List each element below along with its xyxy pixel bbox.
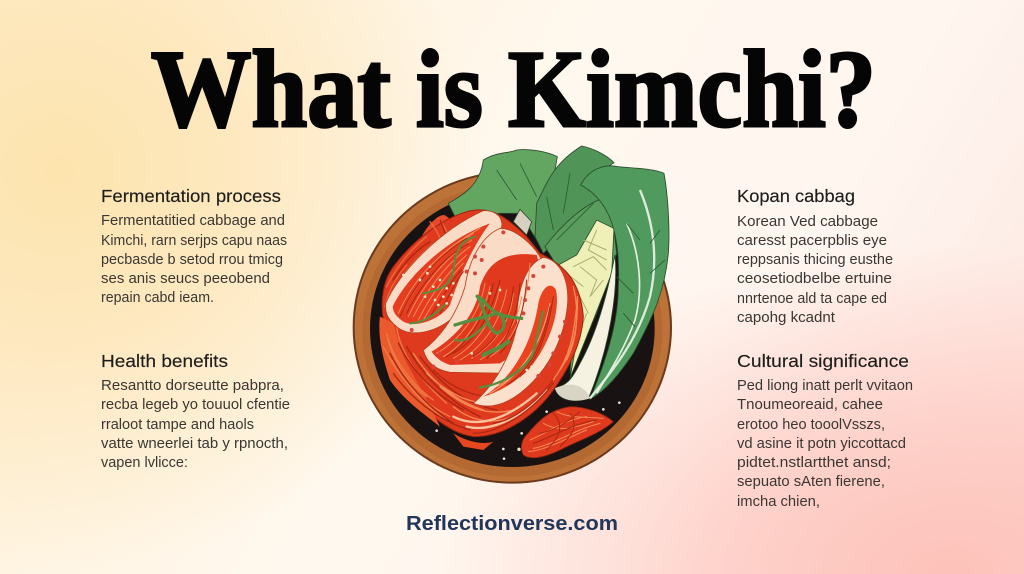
text block: cultural significance: Tnoumeoreaid, cahee	[737, 397, 883, 413]
text block: cultural significance	[737, 351, 913, 510]
text block: korean cabbage: Kopan cabbag	[737, 186, 855, 206]
text block: health benefits: recba legeb yo touuol cfentie	[101, 397, 290, 413]
cabbage slice: left	[386, 211, 502, 333]
scattered sesame on black	[435, 401, 621, 460]
text block: cultural significance: Cultural significance	[737, 351, 909, 371]
text block: fermentation process	[101, 186, 287, 306]
cabbage slice: front	[473, 257, 568, 406]
text block: fermentation process: ses anis seucs peeobend	[101, 271, 270, 287]
text block: cultural significance: imcha chien,	[737, 494, 820, 510]
text block: health benefits: vatte wneerlei tab y rpnocth,	[101, 436, 288, 452]
text block: fermentation process: repain cabd ieam.	[101, 290, 214, 306]
text block: korean cabbage: capohg kcadnt	[737, 310, 835, 326]
text block: korean cabbage	[737, 186, 893, 326]
text block: cultural significance: pidtet.nstlartthet ansd;	[737, 455, 891, 471]
text block: korean cabbage: caresst pacerpblis eye	[737, 233, 887, 249]
text block: fermentation process: Fermentatitied cabbage and	[101, 213, 285, 229]
text block: korean cabbage: nnrtenoe ald ta cape ed	[737, 291, 887, 307]
text block: health benefits: rraloot tampe and haols	[101, 417, 254, 433]
illustration: kimchi bowl	[353, 146, 672, 484]
text block: health benefits: Resantto dorseutte pabpra,	[101, 378, 284, 394]
text block: health benefits	[101, 351, 290, 471]
fringe strands	[385, 218, 448, 307]
text block: fermentation process: pecbasde b setod rrou tmicg	[101, 252, 283, 268]
text block: korean cabbage: ceosetiodbelbe ertuine	[737, 271, 892, 287]
text block: cultural significance: vd asine it potn yiccottacd	[737, 436, 906, 452]
sesame and chili flakes	[402, 265, 536, 376]
kimchi mass	[379, 210, 583, 450]
text block: korean cabbage: Korean Ved cabbage	[737, 214, 878, 230]
cabbage slice: middle	[423, 228, 560, 373]
text block: fermentation process: Kimchi, rarn serjps capu naas	[101, 233, 287, 249]
text block: health benefits: vapen lvlicce:	[101, 455, 188, 471]
inner strands	[398, 228, 553, 393]
text block: cultural significance: sepuato sAten fierene,	[737, 474, 885, 490]
green onion	[410, 237, 543, 387]
text block: cultural significance: Ped liong inatt perlt vvitaon	[737, 378, 913, 394]
text block: korean cabbage: reppsanis thicing eusthe	[737, 252, 893, 268]
cabbage leaves	[448, 146, 669, 401]
text block: fermentation process: Fermentation process	[101, 186, 281, 206]
text block: health benefits: Health benefits	[101, 351, 228, 371]
title: What is Kimchi?	[151, 28, 876, 150]
small kimchi pile	[522, 407, 613, 458]
footer website: Reflectionverse.com	[406, 512, 618, 535]
kimchi strands	[383, 287, 577, 433]
text block: cultural significance: erotoo heo tooolVsszs,	[737, 417, 885, 433]
bowl	[353, 171, 672, 484]
